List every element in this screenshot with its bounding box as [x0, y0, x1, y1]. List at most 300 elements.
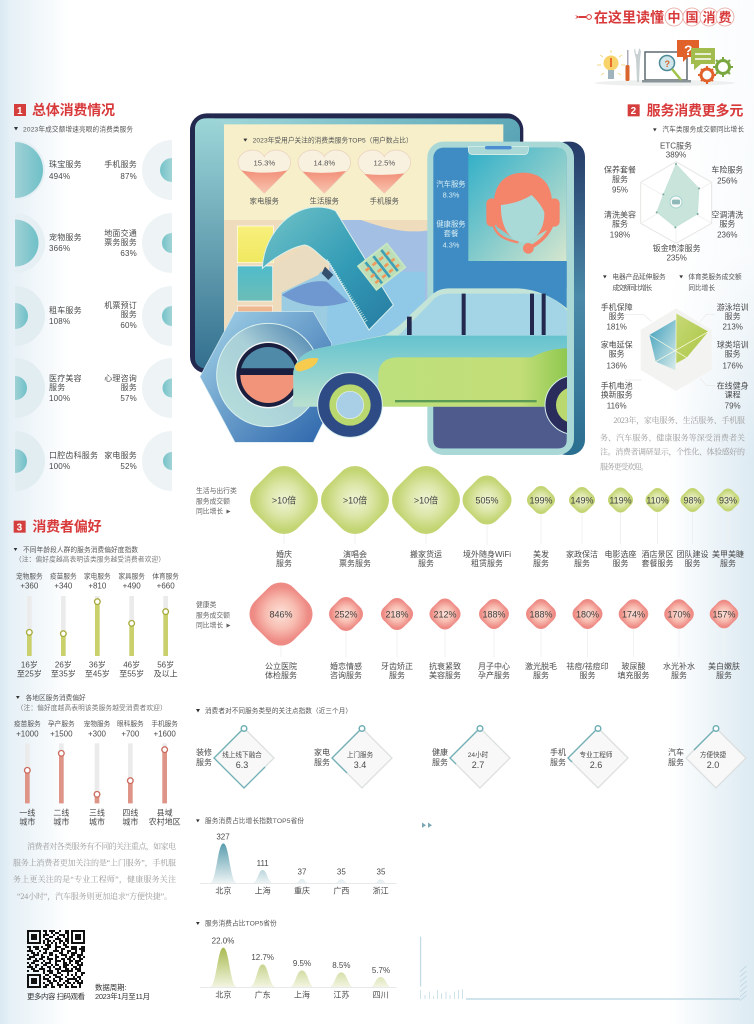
labels: right services: 60%: [120, 321, 137, 330]
heart: 家电服务: 家电服务: [250, 196, 280, 205]
tablet lower screen: [224, 220, 428, 346]
subheading: share: [196, 919, 277, 928]
circled characters: 消: [702, 10, 716, 25]
diamond values: 157%: [712, 610, 736, 620]
diamond labels: 美甲美睫: [712, 549, 744, 559]
bell labels: growth index: 327: [216, 832, 230, 841]
labels: left services: 服务: [49, 382, 65, 392]
bell labels: growth index: [215, 832, 389, 896]
diamond labels: 祛痘/祛痘印: [566, 661, 609, 671]
diamond labels: 电影选座: [604, 549, 636, 559]
panel: section 1 overall consumption: [14, 102, 172, 491]
labels: regions: 城市: [122, 817, 138, 827]
text block: section 2 summary: [600, 415, 745, 472]
diamond labels: 服务: [533, 558, 549, 568]
diamond labels: 服务: [574, 558, 590, 568]
diamond values: 252%: [334, 610, 358, 620]
bell labels: growth index: 浙江: [373, 886, 389, 896]
subheading: auto services: [653, 125, 744, 134]
diamond labels: 团队建设: [676, 549, 708, 559]
diamond labels: 美白嫩肤: [708, 661, 740, 671]
attention item: phone: 专业工程师: [580, 750, 613, 759]
diamond labels: 体检服务: [265, 670, 297, 680]
diamond labels: 月子中心: [478, 661, 510, 671]
labels: left services: 494%: [49, 172, 70, 181]
labels: age groups: [16, 572, 179, 679]
diamond labels: 租赁服务: [471, 558, 503, 568]
labels: right services: 服务: [121, 309, 137, 319]
text block: section 3 summary: 服务上消费者更加关注的是“上门服务”，手机服: [13, 858, 176, 868]
attention item: health: 健康: [432, 747, 448, 757]
icon: arrow: [575, 15, 591, 19]
attention item: health: 服务: [432, 757, 448, 767]
row label: life and travel: 服务成交额: [196, 496, 230, 506]
diamond values: >10倍: [272, 494, 296, 506]
heart: 家电服务: 15.3%: [253, 158, 275, 167]
diamond values: 188%: [529, 610, 553, 620]
diamond values: 218%: [385, 610, 409, 620]
diamond labels: 婚恋情感: [330, 661, 362, 671]
icon: question bubble: ?: [684, 42, 693, 58]
radar labels: extended services: [601, 302, 749, 411]
diamond values: 199%: [529, 496, 553, 506]
diamond labels: 激光脱毛: [525, 661, 557, 671]
labels: right services: 心理咨询: [104, 373, 137, 383]
icon: customer service agent: [486, 173, 560, 254]
bell labels: share: 四川: [373, 991, 389, 1000]
diamond labels: 酒店景区: [642, 549, 674, 559]
phone labels: 8.3%: [443, 191, 460, 200]
bell labels: growth index: 111: [257, 859, 269, 868]
text block: section 3 summary: 消费者对各类服务有不同的关注重点，如家电: [27, 841, 176, 852]
labels: regions: 一线: [19, 808, 35, 818]
labels: regions: 农村地区: [149, 817, 181, 827]
subheadings: appliance and sports: 成交额同比增长: [612, 283, 653, 292]
attention item: health: 24小时: [468, 750, 489, 759]
icon: screwdriver: [626, 50, 630, 81]
labels: regions: 二线: [53, 808, 69, 818]
circled characters: 费: [718, 10, 732, 25]
labels: left services: 100%: [49, 394, 70, 403]
bell labels: share: 22.0%: [212, 937, 234, 946]
chart: right half circles: [142, 140, 172, 491]
diamond labels: 票务服务: [339, 558, 371, 568]
subheadings: appliance and sports: 同比增长: [688, 283, 715, 292]
heart: 家电服务: [238, 150, 291, 205]
panel: life and travel growth diamonds: [196, 458, 744, 568]
heading: section 2: 服务消费更多元: [647, 102, 743, 118]
radar labels: extended services: 手机保障: [601, 302, 633, 312]
attention item: auto: 服务: [668, 757, 684, 767]
labels: right services: 87%: [120, 172, 137, 181]
icon: double arrow: [422, 822, 432, 828]
labels: age groups: 体育服务: [152, 572, 179, 581]
labels: right services: 家电服务: [104, 450, 137, 460]
bell labels: growth index: 广西: [333, 886, 349, 896]
radar labels: auto services: 清洗美容: [604, 209, 636, 219]
labels: regions: 疫苗服务: [14, 719, 41, 728]
diamond values: 212%: [433, 610, 457, 620]
attention item: auto: 2.0: [707, 760, 719, 770]
icon: laptop: ?: [664, 59, 670, 69]
row label: health: 服务成交额: [196, 610, 230, 620]
icon: orange gear: [698, 66, 716, 84]
diamond values: 188%: [482, 610, 506, 620]
labels: age groups: 家具服务: [118, 572, 145, 581]
main illustration: tablet, phone, car, tools: [190, 113, 604, 455]
car pillars: [407, 294, 546, 335]
text block: section 2 summary: 务、汽车服务、健康服务等深受消费者关: [600, 432, 745, 442]
labels: age groups: +490: [123, 582, 141, 591]
radar labels: extended services: 换新服务: [601, 390, 633, 400]
bell labels: share: 5.7%: [372, 966, 390, 975]
decorative ruler frame: [421, 937, 747, 1001]
diamond labels: 咨询服务: [330, 670, 362, 680]
diamond values: >10倍: [343, 494, 367, 506]
radar labels: extended services: 176%: [722, 361, 743, 370]
attention item: appliance: 服务: [314, 757, 330, 767]
labels: age groups: 疫苗服务: [50, 572, 77, 581]
text block: section 3 summary: “24小时”，汽车服务则更加追求“方便快捷”。: [17, 891, 172, 902]
radar labels: extended services: 在线健身: [717, 380, 749, 390]
labels: regions: 县域: [157, 808, 173, 818]
panel: province charts: [196, 816, 397, 1000]
attention item: appliance: 3.4: [354, 760, 366, 770]
phone labels: [436, 180, 466, 249]
panel: section 3 consumer preferences: [14, 519, 181, 827]
heart: 生活服务: [298, 150, 351, 205]
subheadings: appliance and sports: 电器产品延伸服务: [612, 272, 666, 281]
subheading: share: 服务消费占比TOP5省份: [205, 919, 277, 928]
attention item: phone: 手机: [550, 747, 566, 757]
circled characters: [665, 8, 734, 26]
attention item: appliance: 上门服务: [347, 750, 374, 759]
diamond values: 180%: [576, 610, 599, 620]
icon: light bulb: [597, 50, 625, 79]
diamond values: [269, 610, 736, 620]
slider chart: regions: [24, 743, 167, 803]
diamond labels: 服务: [671, 670, 687, 680]
labels: regions: 手机服务: [151, 719, 178, 728]
radar labels: auto services: 95%: [612, 186, 628, 195]
labels: regions: +1500: [50, 729, 73, 738]
subheading: growth index: 服务消费占比增长指数TOP5省份: [205, 816, 304, 825]
row label: life and travel: 生活与出行类: [196, 486, 237, 495]
diamond labels: 公立医院: [265, 661, 297, 671]
labels: left services: 珠宝服务: [49, 159, 82, 169]
radar chart: extended services: [623, 308, 715, 391]
radar chart: auto services: [641, 162, 712, 243]
icon: car: [670, 196, 682, 208]
labels: age groups: 46岁: [123, 660, 140, 670]
bell labels: growth index: 37: [298, 867, 307, 876]
row label: life and travel: 同比增长 ►: [196, 506, 232, 516]
radar labels: auto services: 235%: [666, 254, 687, 263]
diamonds: [242, 575, 742, 653]
text block: section 3 summary: 务上更关注的是“专业工程师”，健康服务关注: [13, 874, 176, 885]
diamond labels: 服务: [716, 670, 732, 680]
diamond labels: 服务: [612, 558, 628, 568]
radar labels: extended services: 球类培训: [717, 340, 749, 350]
wrench and ruler: [262, 207, 405, 330]
bell labels: share: 江苏: [333, 990, 349, 1000]
labels: left services: 100%: [49, 462, 70, 471]
attention item: appliance: 家电: [314, 747, 330, 757]
labels: regions: 四线: [122, 808, 138, 818]
attention item: auto: 汽车: [668, 747, 684, 757]
labels: age groups: 至35岁: [51, 669, 76, 679]
data period note: 数据周期:: [95, 983, 127, 992]
radar labels: auto services: 256%: [717, 176, 738, 185]
labels: right services: 52%: [120, 462, 137, 471]
labels: age groups: 至55岁: [119, 669, 144, 679]
diamond labels: 玻尿酸: [622, 661, 646, 671]
labels: right services: 票务服务: [104, 237, 137, 247]
series title: [575, 8, 734, 26]
attention item: phone: [550, 726, 628, 788]
labels: regions: [14, 719, 181, 827]
labels: left services: 108%: [49, 317, 70, 326]
heart: 手机服务: 手机服务: [370, 196, 400, 205]
text block: section 2 summary: 注。消费者调研显示，个性化、体验感好的: [600, 447, 745, 458]
tablet: [190, 113, 523, 373]
heart: 手机服务: [358, 150, 411, 205]
radar labels: extended services: 181%: [606, 322, 627, 331]
radar labels: auto services: 服务: [612, 218, 628, 228]
diamond labels: 服务: [276, 558, 292, 568]
attention item: phone: 服务: [550, 757, 566, 767]
headlight: [295, 358, 318, 372]
text block: section 3 summary: [13, 841, 176, 902]
labels: age groups: 26岁: [55, 660, 72, 670]
radar labels: auto services: 钣金喷漆服务: [653, 243, 701, 253]
text block: section 2 summary: 服务更受欢迎。: [600, 462, 648, 472]
tablet heading: 2023年受用户关注的消费类服务TOP5（用户数占比）: [253, 136, 413, 145]
bell labels: growth index: 35: [337, 868, 346, 877]
labels: age groups: 16岁: [21, 660, 38, 670]
attention item: health: 2.7: [472, 760, 484, 770]
diamond labels: 服务: [418, 558, 434, 568]
diamond values: >10倍: [414, 494, 438, 506]
front wheel: [318, 373, 382, 437]
heart: 手机服务: 12.5%: [373, 158, 395, 167]
diamond labels: 服务: [389, 670, 405, 680]
diamond labels: 套餐服务: [642, 558, 674, 568]
heading: section 3: 3: [17, 522, 23, 533]
subheading: regions: 各地区服务消费偏好: [26, 693, 86, 702]
labels: regions: +1000: [16, 729, 39, 738]
bell labels: share: 9.5%: [293, 959, 311, 968]
labels: age groups: 36岁: [89, 660, 106, 670]
diamond labels: 服务: [533, 670, 549, 680]
panel: section 2 services more diverse: [600, 102, 749, 472]
labels: left services: [49, 159, 98, 471]
subheading: age groups: [14, 545, 165, 564]
labels: right services: 57%: [120, 394, 137, 403]
radar labels: auto services: 198%: [610, 231, 630, 240]
data period note: 2023年1月至11月: [95, 992, 150, 1001]
bell labels: share: 广东: [255, 990, 271, 1000]
row label: health: 同比增长 ►: [196, 620, 232, 630]
labels: right services: 地面交通: [104, 228, 137, 238]
labels: left services: 租车服务: [49, 305, 82, 315]
radar labels: auto services: 389%: [666, 151, 686, 160]
phone: [427, 142, 585, 455]
labels: regions: +700: [121, 729, 140, 738]
attention item: decoration: 线上线下融合: [222, 750, 262, 759]
bell labels: growth index: 重庆: [294, 886, 310, 896]
labels: age groups: 至45岁: [85, 669, 110, 679]
labels: age groups: 宠物服务: [16, 572, 43, 581]
diamond labels: 美发: [533, 549, 549, 559]
bell chart: growth index: [200, 843, 397, 884]
labels: regions: 眼科服务: [117, 719, 144, 728]
text block: section 2 summary: 2023年，家电服务、生活服务、手机服: [613, 415, 745, 426]
subheading: auto services: 汽车类服务成交额同比增长: [662, 125, 744, 134]
diamond labels: 服务: [684, 558, 700, 568]
labels: regions: +300: [88, 729, 107, 738]
diamond labels: 水光补水: [663, 661, 695, 671]
rear wheel: [544, 376, 567, 434]
bell labels: growth index: 35: [377, 868, 386, 877]
icon: wrench: [634, 48, 641, 82]
radar labels: extended services: 116%: [607, 402, 627, 411]
labels: right services: 机票预订: [104, 300, 137, 310]
labels: right services: 服务: [121, 382, 137, 392]
icon: green gear: [713, 57, 733, 77]
bell labels: share: 8.5%: [332, 961, 350, 970]
attention item: phone: 2.6: [590, 760, 602, 770]
radar labels: auto services: 236%: [717, 231, 738, 240]
bell labels: growth index: 北京: [215, 886, 231, 896]
diamond labels: 服务: [720, 558, 736, 568]
labels: age groups: 家电服务: [84, 572, 111, 581]
labels: regions: 三线: [89, 808, 105, 818]
diamond values: 98%: [683, 496, 702, 506]
radar labels: auto services: 服务: [612, 174, 628, 184]
car: [293, 288, 567, 438]
attention item: decoration: 6.3: [236, 760, 248, 770]
labels: left services: 医疗美容: [49, 373, 82, 383]
QR code: [27, 931, 85, 987]
radar labels: auto services: [604, 140, 743, 263]
QR caption: 更多内容 扫码观看: [27, 992, 85, 1001]
radar labels: auto services: 服务: [719, 218, 735, 228]
radar labels: extended services: 课程: [725, 391, 741, 400]
phone labels: 4.3%: [443, 240, 460, 249]
attention item: decoration: [196, 726, 274, 788]
labels: right services: 手机服务: [104, 159, 137, 169]
radar labels: auto services: ETC服务: [660, 140, 692, 150]
bell labels: share: [212, 937, 390, 1000]
labels: age groups: 及以上: [154, 670, 178, 679]
radar labels: extended services: 服务: [609, 349, 625, 359]
diamond labels: [265, 661, 740, 680]
ruler ticks: [327, 260, 367, 322]
diamond values: 505%: [475, 496, 499, 506]
diamond labels: 家政保洁: [566, 549, 598, 559]
panel: health growth diamonds: [196, 575, 742, 680]
radar labels: extended services: 79%: [725, 402, 741, 411]
labels: age groups: +810: [88, 582, 107, 591]
heading: section 1: 总体消费情况: [32, 102, 115, 118]
labels: left services: 366%: [49, 244, 70, 253]
attention item: decoration: 装修: [196, 747, 212, 757]
attention item: auto: [668, 726, 746, 788]
radar labels: extended services: 游泳培训: [717, 302, 749, 312]
heading: section 2: 2: [631, 106, 637, 117]
bell labels: share: 12.7%: [251, 953, 274, 962]
attention item: decoration: 服务: [196, 757, 212, 767]
labels: age groups: +360: [20, 582, 39, 591]
subheading: attention index: 消费者对不同服务类型的关注点指数（近三个月）: [205, 706, 352, 715]
diamond values: 149%: [570, 496, 594, 506]
panel: attention index diamonds: [196, 706, 746, 788]
diamond labels: 境外随身WiFi: [463, 549, 511, 559]
radar labels: extended services: 服务: [725, 349, 741, 359]
heart: 生活服务: 生活服务: [310, 196, 340, 205]
icon group: service tools: [595, 40, 735, 86]
diamond labels: 牙齿矫正: [381, 661, 413, 671]
diamond labels: 填充服务: [618, 670, 650, 680]
labels: age groups: +660: [157, 582, 175, 591]
diamond labels: 演唱会: [343, 549, 367, 559]
diamond values: 170%: [667, 610, 691, 620]
labels: age groups: 56岁: [157, 660, 174, 670]
phone labels: 套餐: [444, 229, 459, 238]
car green panel: [378, 348, 567, 407]
diamond labels: 美容服务: [429, 670, 461, 680]
series title: 在这里读懂: [594, 10, 664, 26]
labels: left services: 口腔齿科服务: [49, 450, 98, 460]
attention item: appliance: [314, 726, 392, 788]
bell chart: share: [200, 948, 397, 988]
phone labels: 健康服务: [436, 220, 466, 229]
labels: left services: 宠物服务: [49, 232, 82, 242]
diamond values: 110%: [646, 496, 669, 506]
diamond labels: 孕产服务: [478, 670, 510, 680]
row label: health: [196, 600, 232, 630]
diamond labels: 服务: [580, 670, 596, 680]
phone notch: [468, 147, 528, 155]
subheading: regions: [16, 693, 167, 712]
labels: regions: 城市: [89, 817, 105, 827]
phone labels: 汽车服务: [436, 180, 466, 189]
subheading: regions: （注：偏好度越高表明该类服务越受消费者欢迎）: [17, 703, 167, 712]
attention item: health: [432, 726, 510, 788]
radar labels: auto services: 保养套餐: [604, 165, 636, 175]
subheading: fast growing services: 2023年成交额增速亮眼的消费类服务: [23, 124, 133, 134]
radar labels: auto services: 空调清洗: [711, 209, 743, 219]
circled characters: 中: [668, 10, 681, 25]
labels: age groups: +340: [54, 582, 73, 591]
hex nut with ring: [200, 312, 332, 442]
chart: hearts top 3: [238, 150, 411, 205]
radar labels: extended services: 136%: [606, 361, 627, 370]
heart: 生活服务: 14.8%: [313, 158, 335, 167]
diamond labels: 搬家货运: [410, 549, 442, 559]
bell labels: share: 上海: [294, 990, 310, 1000]
chart: left half circles: [15, 142, 45, 490]
labels: regions: +1600: [153, 729, 176, 738]
row label: health: 健康类: [196, 600, 217, 609]
radar labels: extended services: 213%: [722, 322, 743, 331]
labels: regions: 孕产服务: [48, 719, 75, 728]
diamond values: 174%: [622, 610, 645, 620]
slider chart: age groups: [26, 596, 168, 656]
radar labels: extended services: 服务: [609, 311, 625, 321]
diamond labels: [276, 549, 744, 568]
